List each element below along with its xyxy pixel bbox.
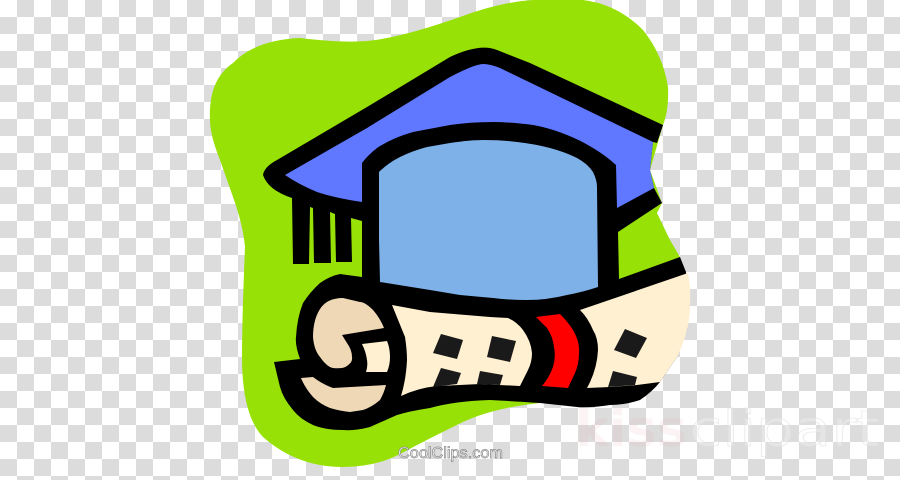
diploma: right cream section bbox=[580, 273, 690, 388]
scroll: tan spiral upper bbox=[313, 298, 384, 368]
watermark: KissClipart: clipart bbox=[689, 400, 880, 458]
scroll: cream inner curl bbox=[362, 341, 390, 372]
watermark: KissClipart bbox=[575, 400, 880, 458]
scroll: tan spiral lower bbox=[301, 377, 386, 412]
diploma: dark squares bbox=[433, 329, 647, 387]
diploma: red ribbon bbox=[536, 314, 579, 388]
watermark: CoolClips.com: CoolClips.com bbox=[398, 445, 503, 462]
diploma: middle cream section bbox=[392, 305, 532, 396]
watermark: KissClipart: kiss bbox=[575, 400, 687, 458]
green blob background bbox=[210, 0, 680, 467]
cap body: light blue crown bbox=[379, 140, 598, 300]
black outline silhouette bbox=[263, 48, 690, 430]
cap top: blue board bbox=[285, 64, 654, 208]
